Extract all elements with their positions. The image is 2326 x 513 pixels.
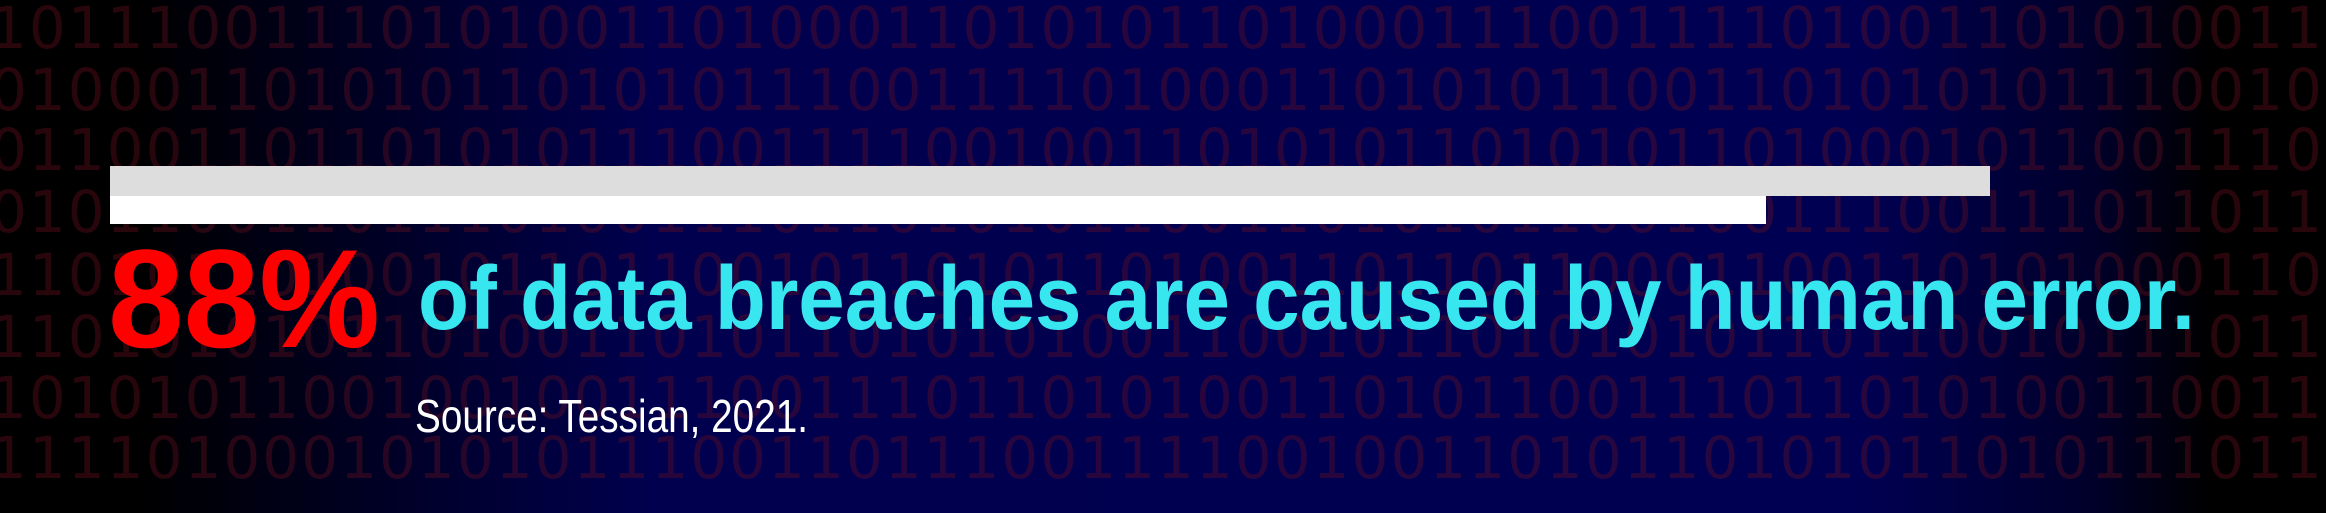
gray bar xyxy=(110,166,1990,196)
source note: Source: Tessian, 2021. xyxy=(415,390,808,442)
stat: 88%: 88% xyxy=(108,220,380,377)
headline statistic xyxy=(108,220,2195,377)
headline text: of data breaches are caused by human error. xyxy=(418,249,2195,349)
white bar xyxy=(110,196,1766,224)
